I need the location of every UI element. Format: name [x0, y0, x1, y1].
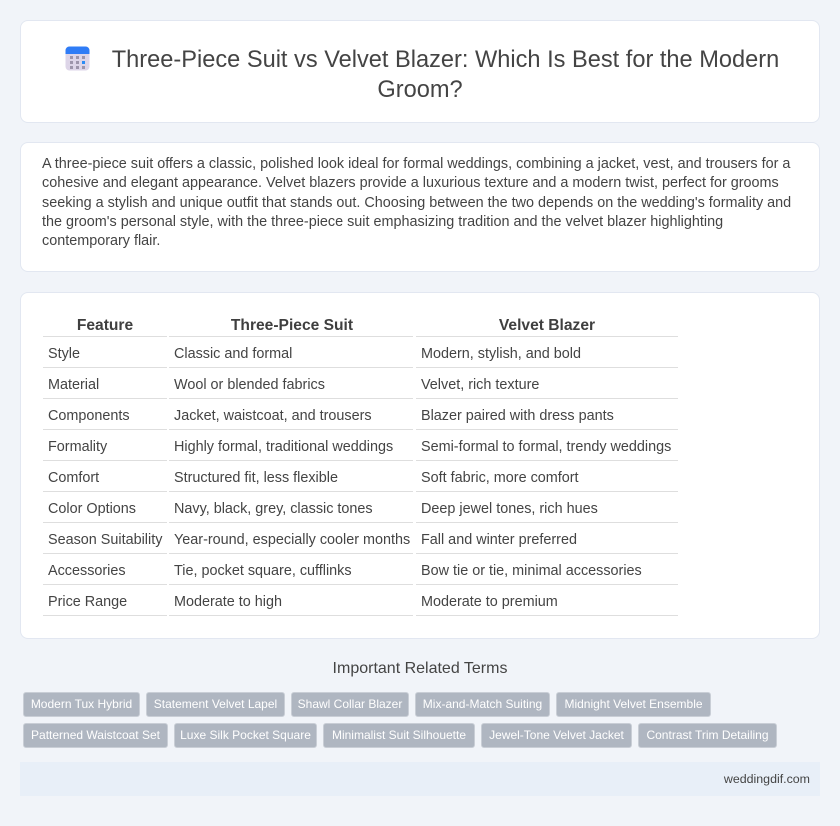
panel: comparison table: Year-round, especially cooler months: [174, 532, 410, 548]
panel: comparison table: Material: [48, 377, 99, 393]
panel: comparison table: Three-Piece Suit: [231, 317, 353, 334]
icon: calendar: [66, 46, 90, 70]
title: Three-Piece Suit vs Velvet Blazer: Which Is Best for the Modern: [112, 47, 779, 73]
panel: title card: [20, 20, 820, 123]
table header: [77, 317, 595, 334]
panel: comparison table: Components: [48, 408, 130, 424]
related term tags: Modern Tux Hybrid: [31, 697, 132, 711]
related term tags: Patterned Waistcoat Set: [31, 728, 160, 742]
row: style: [48, 346, 581, 362]
panel: comparison table: Highly formal, traditional weddings: [174, 439, 393, 455]
related term tags: Statement Velvet Lapel: [154, 697, 277, 711]
summary paragraph: [42, 156, 791, 249]
row: color options: [48, 501, 598, 517]
panel: comparison table: Semi-formal to formal, trendy weddings: [421, 439, 671, 455]
related term tags: Shawl Collar Blazer: [298, 697, 402, 711]
related term tags: Mix-and-Match Suiting: [423, 697, 542, 711]
summary paragraph: A three-piece suit offers a classic, polished look ideal for formal weddings, combining a jacket, vest, and trousers for a: [42, 156, 790, 172]
panel: comparison table: Classic and formal: [174, 346, 292, 362]
panel: comparison table: Bow tie or tie, minimal accessories: [421, 563, 642, 579]
panel: comparison table: Modern, stylish, and bold: [421, 346, 581, 362]
related term tags: Luxe Silk Pocket Square: [180, 728, 311, 742]
panel: comparison table: Color Options: [48, 501, 136, 517]
related term tags: Minimalist Suit Silhouette: [332, 728, 466, 742]
footer bar: [20, 762, 820, 796]
row: components: [48, 408, 614, 424]
panel: comparison table: Feature: [77, 317, 133, 334]
row: accessories: [48, 563, 642, 579]
panel: comparison table: Wool or blended fabrics: [174, 377, 325, 393]
summary paragraph: the groom's personal style, with the three-piece suit emphasizing tradition and the velvet blazer highlighting: [42, 214, 723, 230]
panel: comparison table: Style: [48, 346, 80, 362]
panel: comparison table: Formality: [48, 439, 107, 455]
row: material: [48, 377, 539, 393]
panel: comparison table: Velvet Blazer: [499, 317, 595, 334]
panel: summary text: [20, 142, 820, 272]
summary paragraph: contemporary flair.: [42, 233, 160, 249]
panel: comparison table: Price Range: [48, 594, 127, 610]
panel: comparison table: Moderate to premium: [421, 594, 558, 610]
panel: comparison table: Blazer paired with dress pants: [421, 408, 614, 424]
panel: comparison table: [20, 292, 820, 639]
summary paragraph: cohesive and elegant appearance. Velvet blazers provide a luxurious texture and a modern twist, perfect for grooms: [42, 175, 779, 191]
related term tags: [23, 692, 777, 748]
heading: related terms: Important Related Terms: [333, 660, 507, 677]
panel: comparison table: Tie, pocket square, cufflinks: [174, 563, 352, 579]
row: season suitability: [48, 532, 577, 548]
title: [112, 47, 779, 103]
panel: comparison table: Navy, black, grey, classic tones: [174, 501, 373, 517]
panel: comparison table: Structured fit, less flexible: [174, 470, 338, 486]
related term tags: Contrast Trim Detailing: [646, 728, 769, 742]
panel: comparison table: Deep jewel tones, rich hues: [421, 501, 598, 517]
panel: comparison table: Soft fabric, more comfort: [421, 470, 579, 486]
panel: comparison table: Velvet, rich texture: [421, 377, 539, 393]
related term tags: Midnight Velvet Ensemble: [564, 697, 703, 711]
row: comfort: [48, 470, 579, 486]
title: Groom?: [377, 77, 463, 103]
row: price range: [48, 594, 558, 610]
panel: comparison table: Comfort: [48, 470, 99, 486]
panel: comparison table: Moderate to high: [174, 594, 282, 610]
related term tags: Jewel-Tone Velvet Jacket: [489, 728, 624, 742]
footer source: weddingdif.com: [724, 772, 810, 786]
panel: comparison table: Season Suitability: [48, 532, 162, 548]
summary paragraph: seeking a stylish and unique outfit that stands out. Choosing between the two depends on the wedding's formality and: [42, 195, 791, 211]
panel: comparison table: Fall and winter preferred: [421, 532, 577, 548]
panel: comparison table: Jacket, waistcoat, and trousers: [174, 408, 372, 424]
panel: comparison table: Accessories: [48, 563, 126, 579]
row: formality: [48, 439, 671, 455]
